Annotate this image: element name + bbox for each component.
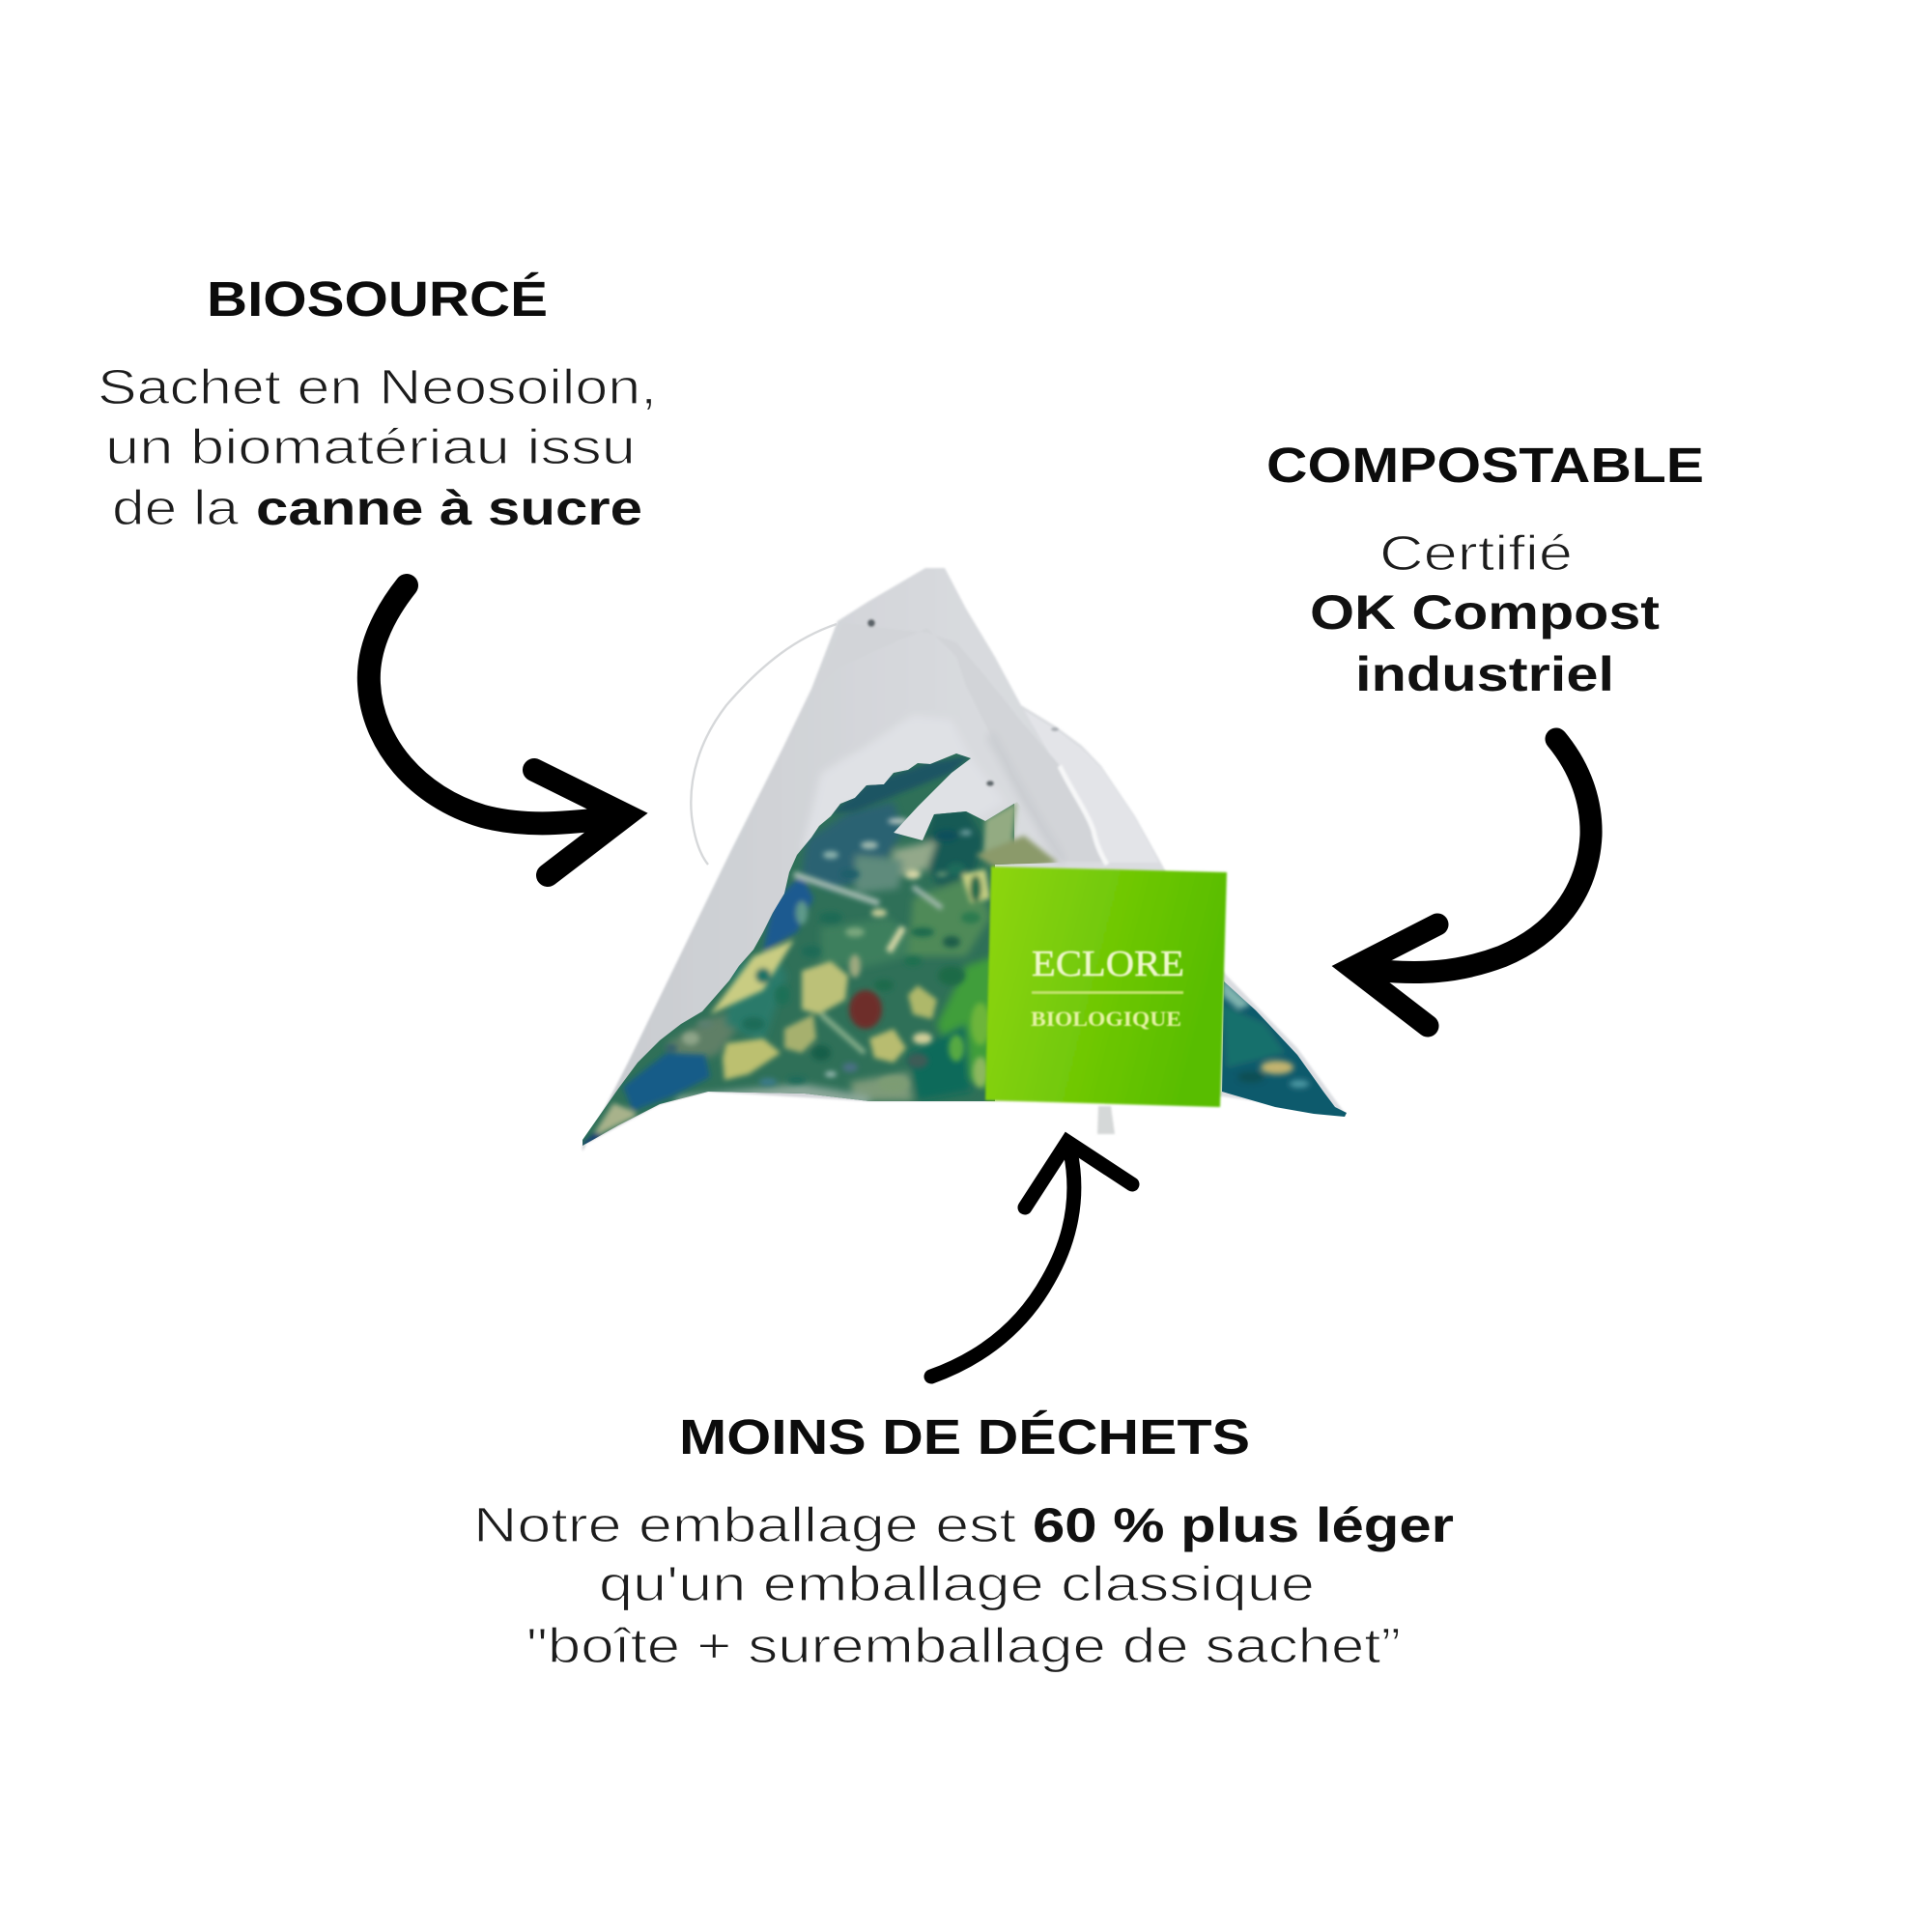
text block: neosoilon: Sachet en Neosoilon, — [98, 359, 657, 414]
tea leaves — [570, 744, 1058, 1159]
text block: neosoilon: canne à sucre — [256, 481, 642, 535]
tea bag mesh — [582, 568, 1345, 1151]
text block: neosoilon: de la — [112, 480, 240, 535]
text block: emballage: 60 % plus léger — [1033, 1498, 1454, 1552]
heading and text: biosourcé — [98, 271, 657, 535]
arrow: compostable to tea bag — [1352, 739, 1591, 1026]
arrow: moins de déchets to tea bag — [931, 1142, 1132, 1377]
heading and text: moins de déchets — [473, 1409, 1454, 1673]
heading: biosourcé: BIOSOURCÉ — [207, 271, 548, 327]
text block: certification: OK Compost — [1310, 585, 1660, 639]
tea dark top strip — [831, 755, 971, 813]
text block: neosoilon — [98, 359, 657, 535]
heading: compostable: COMPOSTABLE — [1266, 438, 1704, 493]
arrow: biosourcé to tea bag — [369, 585, 626, 875]
text block: certification: industriel — [1355, 647, 1614, 701]
text block: certification — [1310, 526, 1660, 701]
tag divider — [1032, 991, 1183, 994]
green tag — [985, 867, 1227, 1107]
text block: certification: Certifié — [1379, 526, 1573, 581]
olive leaves — [710, 940, 794, 1014]
tag subtitle: BIOLOGIQUE — [1031, 1007, 1181, 1031]
text block: emballage: Notre emballage est — [473, 1497, 1016, 1552]
tea bag string — [691, 624, 837, 865]
text block: emballage: qu'un emballage classique — [599, 1556, 1315, 1611]
tea leaves: right corner — [1222, 981, 1347, 1117]
heading: moins de déchets: MOINS DE DÉCHETS — [679, 1409, 1250, 1464]
text block: neosoilon: un biomatériau issu — [105, 419, 636, 474]
text block: emballage: "boîte + suremballage de sachet” — [526, 1618, 1401, 1673]
tag brand: ECLORE — [1032, 944, 1184, 984]
mottled specks — [823, 851, 838, 859]
text block: emballage — [473, 1497, 1454, 1673]
tea bag tab string — [1097, 1106, 1115, 1134]
heading and text: compostable — [1266, 438, 1704, 701]
tea bag — [570, 568, 1352, 1159]
